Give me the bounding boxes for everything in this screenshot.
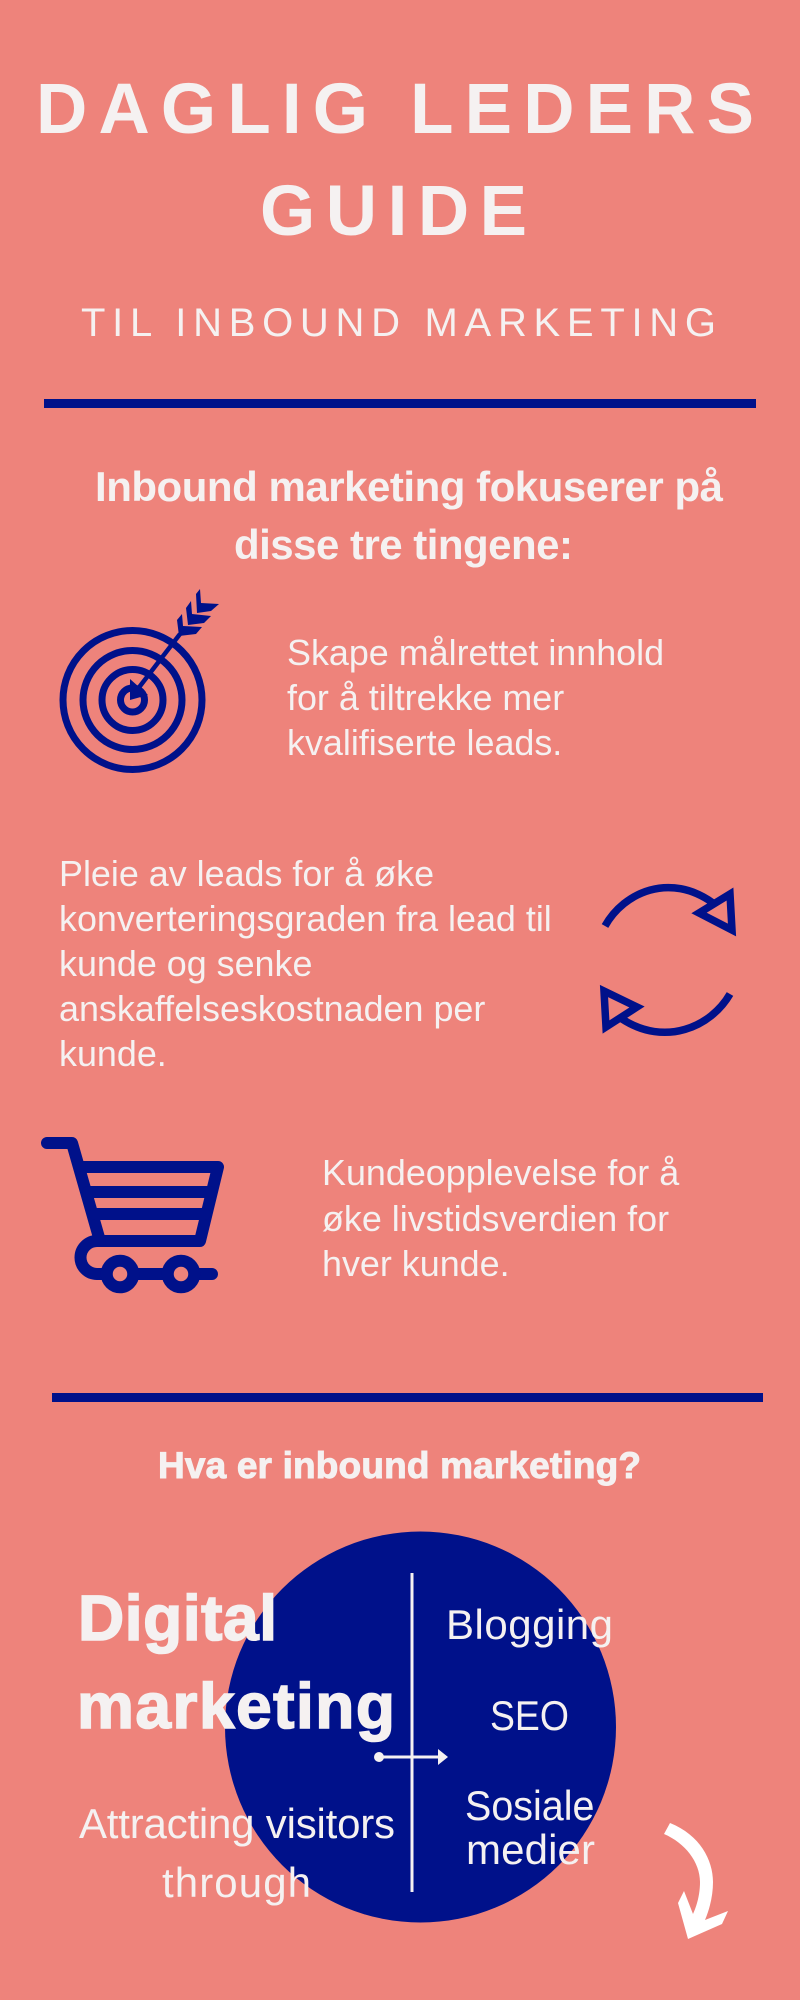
list: channels: Sosiale [465, 1782, 594, 1829]
list: channels [446, 1601, 613, 1873]
text: customer experience: Kundeopplevelse for å [322, 1153, 679, 1193]
text: lead nurturing: kunde. [59, 1034, 167, 1074]
vertical divider [410, 1573, 414, 1892]
text: targeted content: Skape målrettet innhold [287, 633, 664, 673]
circle [225, 1532, 616, 1922]
heading: three focus areas: disse tre tingene: [234, 521, 573, 568]
text: attracting visitors through: through [162, 1859, 311, 1906]
list: channels: Blogging [446, 1601, 613, 1648]
title: GUIDE [260, 172, 527, 251]
icon: curved arrow [664, 1823, 728, 1939]
title [36, 70, 754, 251]
subtitle: TIL INBOUND MARKETING [81, 301, 716, 345]
arrow [374, 1749, 448, 1765]
icon: cycle arrows [604, 888, 732, 1032]
heading: three focus areas [95, 463, 724, 568]
heading: digital marketing [77, 1582, 395, 1742]
title: DAGLIG LEDERS [36, 70, 754, 149]
text: lead nurturing: konverteringsgraden fra lead til [59, 899, 552, 939]
icon: shopping cart [47, 1143, 218, 1287]
heading: three focus areas: Inbound marketing fokuserer på [95, 463, 724, 510]
text: lead nurturing: Pleie av leads for å øke [59, 854, 434, 894]
text: lead nurturing [59, 854, 552, 1074]
text: attracting visitors through: Attracting visitors [79, 1800, 395, 1847]
text: customer experience: øke livstidsverdien for [322, 1199, 669, 1239]
heading: digital marketing: marketing [77, 1670, 395, 1742]
text: targeted content: for å tiltrekke mer [287, 678, 564, 718]
text: attracting visitors through [79, 1800, 395, 1906]
text: customer experience [322, 1153, 679, 1284]
list: channels: SEO [490, 1693, 569, 1740]
heading: digital marketing: Digital [78, 1582, 277, 1654]
list: channels: medier [466, 1826, 595, 1873]
text: lead nurturing: anskaffelseskostnaden per [59, 989, 485, 1029]
text: targeted content: kvalifiserte leads. [287, 723, 562, 763]
text: targeted content [287, 633, 664, 763]
heading: what is inbound marketing: Hva er inbound marketing? [158, 1445, 641, 1486]
text: customer experience: hver kunde. [322, 1244, 510, 1284]
icon: target with arrow [63, 589, 219, 770]
text: lead nurturing: kunde og senke [59, 944, 312, 984]
